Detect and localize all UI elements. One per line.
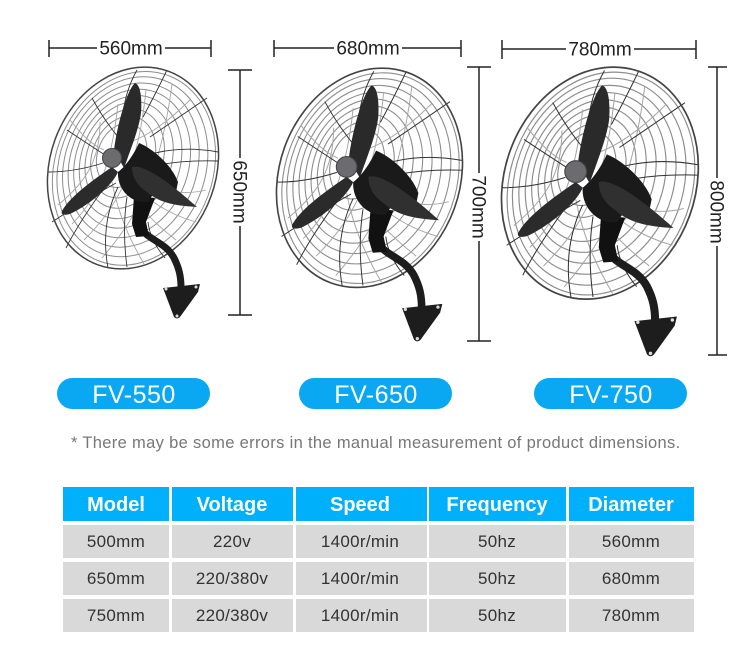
dimension: height 700mm bbox=[467, 67, 491, 341]
dimension: height 700mm: 700mm bbox=[468, 175, 488, 239]
table row: 650mm: 650mm bbox=[87, 569, 145, 588]
table row: 500mm: 220v bbox=[213, 532, 251, 551]
table row: 750mm: 750mm bbox=[87, 606, 145, 625]
table row: 750mm: 780mm bbox=[602, 606, 660, 625]
table row: 650mm: 680mm bbox=[602, 569, 660, 588]
dimension: height 800mm: 800mm bbox=[706, 180, 726, 244]
table row: 650mm: 220/380v bbox=[196, 569, 268, 588]
table row: 650mm: 1400r/min bbox=[321, 569, 399, 588]
table row: 500mm: 560mm bbox=[602, 532, 660, 551]
dimension: height 650mm: 650mm bbox=[228, 160, 250, 224]
table row: 650mm: 50hz bbox=[478, 569, 516, 588]
dimension: width 680mm: 680mm bbox=[336, 38, 400, 60]
dimension: width 560mm bbox=[49, 38, 211, 60]
specification table bbox=[63, 487, 694, 632]
model label: FV-650 bbox=[299, 378, 452, 409]
table row: 750mm bbox=[63, 599, 694, 632]
dimension: width 560mm: 560mm bbox=[99, 38, 163, 60]
table header row: Speed bbox=[330, 494, 390, 516]
table row: 750mm: 220/380v bbox=[196, 606, 268, 625]
fan illustration: FV-750 bbox=[470, 39, 730, 356]
model label: FV-750: FV-750 bbox=[569, 381, 653, 409]
dimension: width 780mm bbox=[502, 40, 696, 60]
model label: FV-650: FV-650 bbox=[334, 381, 418, 409]
dimension: height 650mm bbox=[228, 70, 252, 315]
dimension: height 800mm bbox=[706, 67, 727, 355]
dimension: width 680mm bbox=[274, 38, 461, 60]
table row: 750mm: 50hz bbox=[478, 606, 516, 625]
table header row: Diameter bbox=[588, 494, 674, 516]
fan illustration: FV-650 bbox=[246, 42, 493, 341]
fan illustration: FV-550 bbox=[20, 43, 246, 319]
table row: 500mm: 1400r/min bbox=[321, 532, 399, 551]
table row: 650mm bbox=[63, 562, 694, 595]
table row: 500mm: 50hz bbox=[478, 532, 516, 551]
dimension: width 780mm: 780mm bbox=[568, 40, 632, 60]
model label: FV-550: FV-550 bbox=[92, 381, 176, 409]
model label: FV-750 bbox=[534, 378, 687, 409]
disclaimer note: * There may be some errors in the manual measurement of product dimensions. bbox=[71, 434, 681, 452]
table header row bbox=[63, 487, 694, 521]
table header row: Model bbox=[87, 494, 145, 516]
table row: 500mm bbox=[63, 525, 694, 558]
table header row: Frequency bbox=[446, 494, 548, 516]
table header row: Voltage bbox=[197, 494, 267, 516]
table row: 750mm: 1400r/min bbox=[321, 606, 399, 625]
model label: FV-550 bbox=[57, 378, 210, 409]
table row: 500mm: 500mm bbox=[87, 532, 145, 551]
